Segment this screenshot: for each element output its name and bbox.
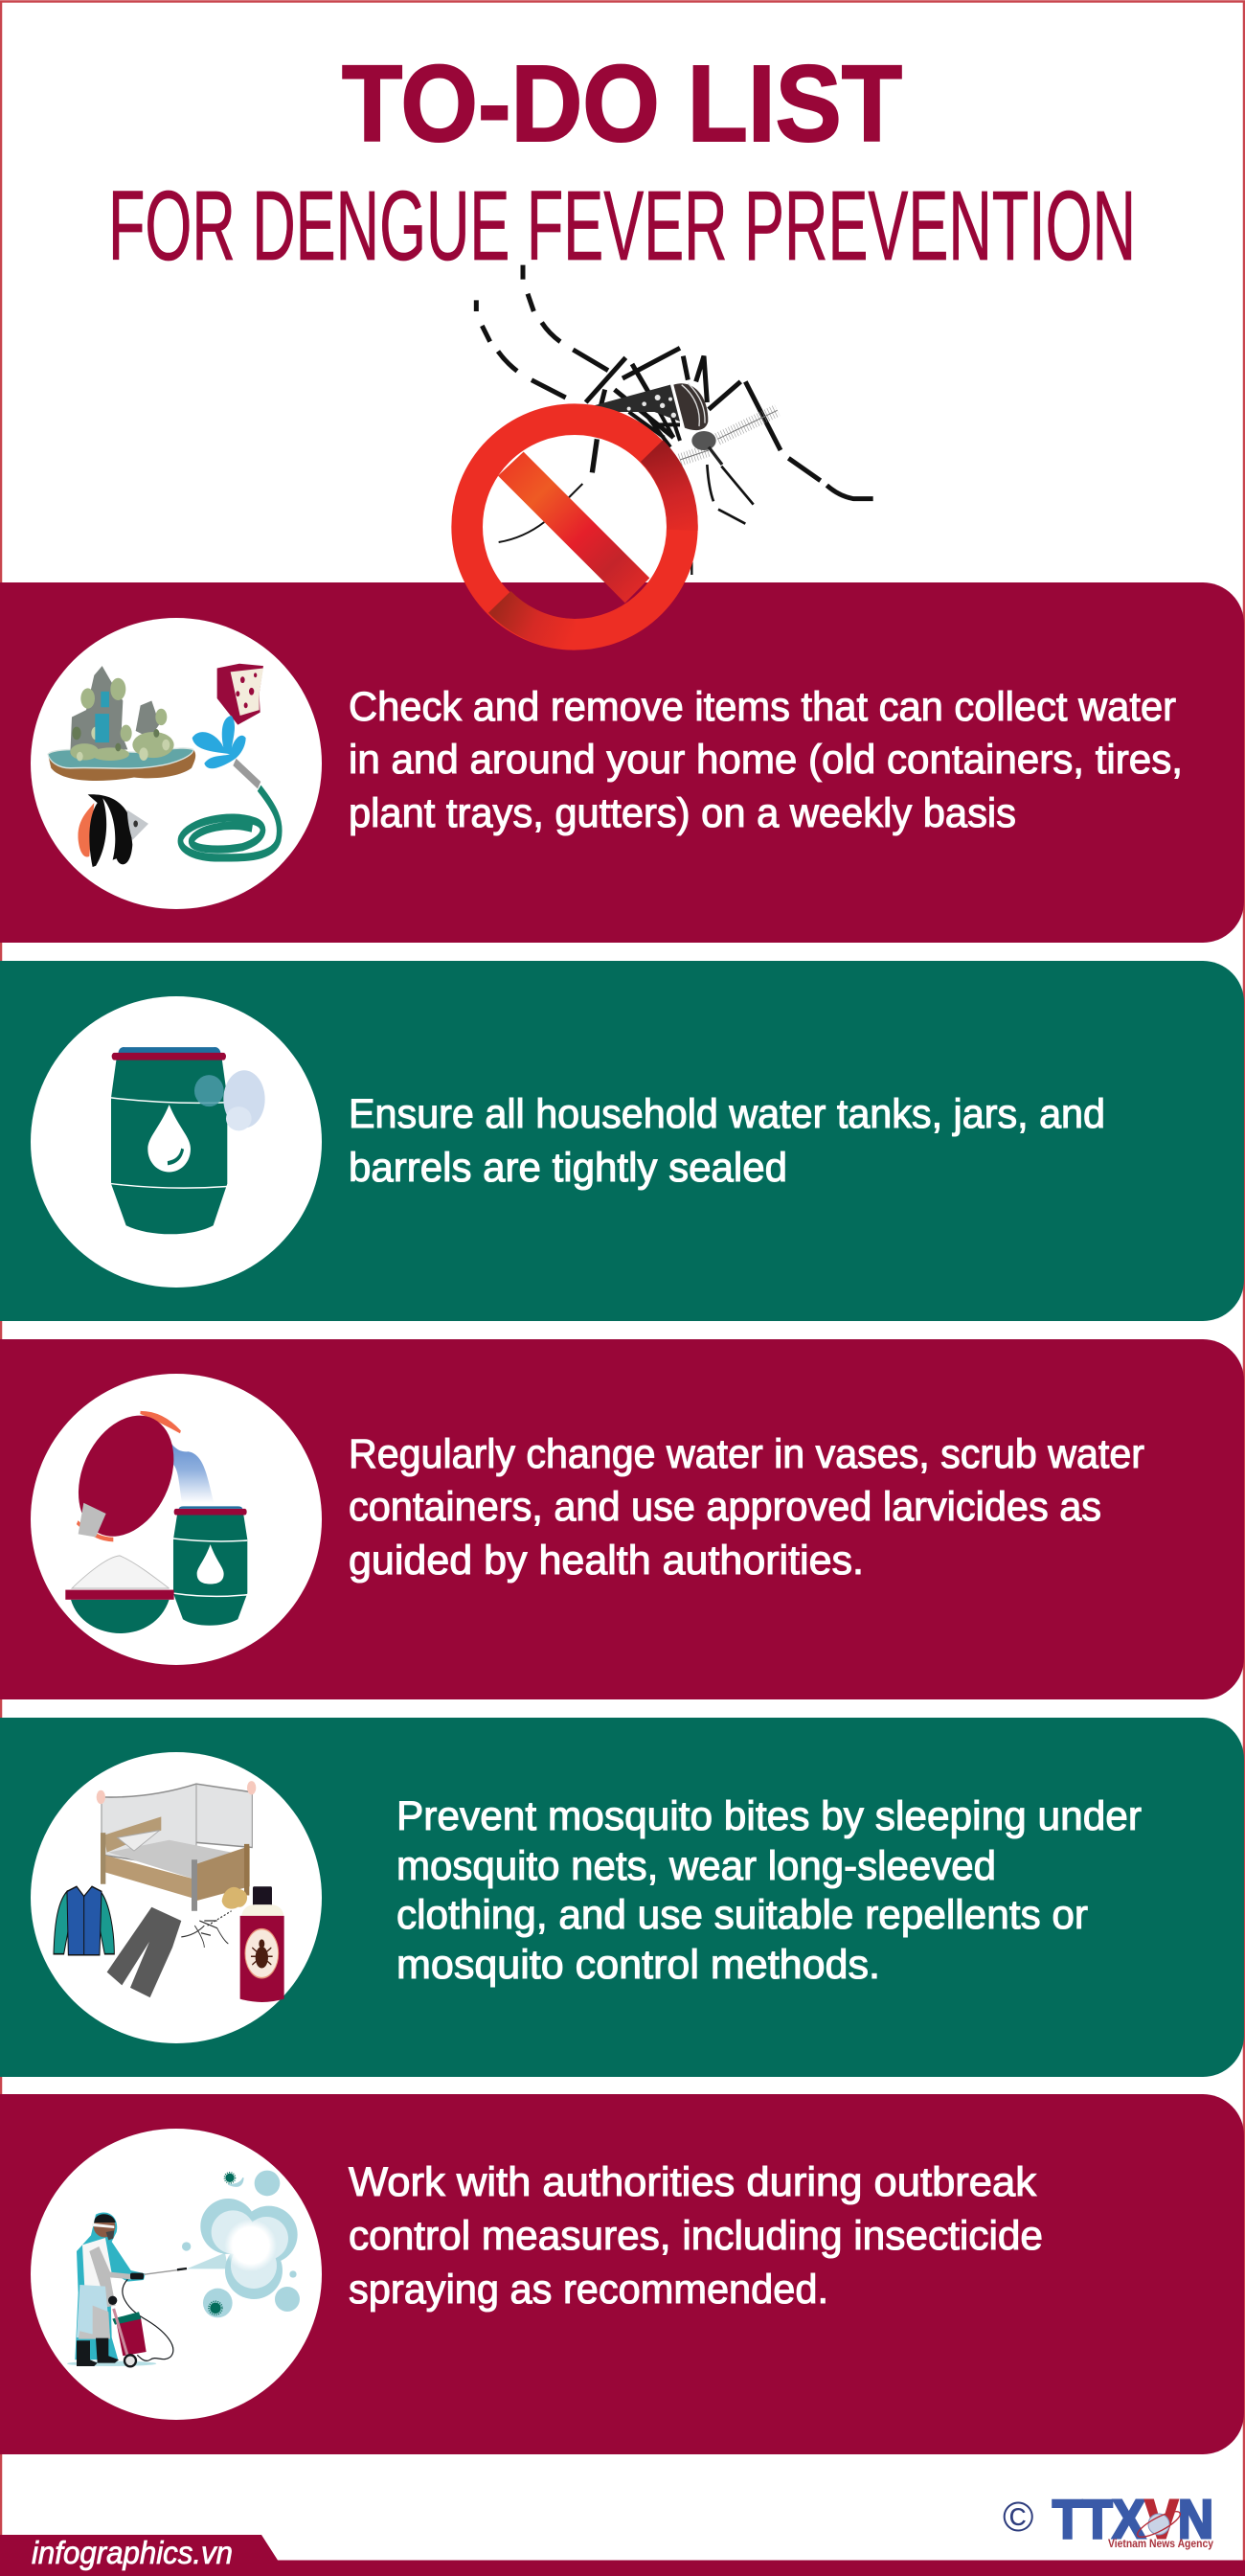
text block: in and around your home (old containers, tires,	[349, 737, 1183, 783]
website label: infographics.vn	[32, 2535, 233, 2570]
icon: water splash	[192, 716, 246, 768]
text block: mosquito control methods.	[396, 1942, 880, 1988]
icon: bowl of powder	[65, 1556, 174, 1633]
icon: tipped container	[65, 1391, 188, 1561]
panel: change water	[0, 1339, 1244, 1699]
icon: trousers	[107, 1907, 181, 1997]
text block	[396, 1793, 1142, 1988]
text block: containers, and use approved larvicides as	[349, 1484, 1101, 1530]
text block: clothing, and use suitable repellents or	[396, 1892, 1088, 1938]
text block: control measures, including insecticide	[349, 2213, 1043, 2259]
icon: jacket	[54, 1886, 114, 1955]
panel: check and remove items	[0, 582, 1244, 943]
icon: barrel	[173, 1506, 247, 1626]
globe emblem	[1135, 2507, 1183, 2542]
text block: Work with authorities during outbreak	[349, 2159, 1037, 2205]
text block	[349, 2159, 1043, 2313]
panel: prevent bites	[0, 1718, 1244, 2077]
agency name: Vietnam News Agency	[1108, 2539, 1214, 2550]
text block	[349, 1431, 1144, 1584]
icon: spray cloud and viruses	[182, 2171, 300, 2317]
prohibition sign	[467, 420, 682, 634]
text block	[349, 1091, 1105, 1191]
text block: barrels are tightly sealed	[349, 1145, 787, 1191]
icon circle: items that collect water	[31, 618, 322, 909]
mosquito	[476, 265, 873, 575]
icon: worker with sprayer	[67, 2213, 187, 2366]
footer bar	[0, 2535, 1245, 2576]
icon: repellent spray	[222, 1886, 284, 2002]
text block: guided by health authorities.	[349, 1538, 864, 1584]
text block: plant trays, gutters) on a weekly basis	[349, 790, 1016, 836]
icon circle: insecticide spraying	[31, 2129, 322, 2420]
text block: Check and remove items that can collect water	[349, 684, 1176, 730]
text block: Ensure all household water tanks, jars, and	[349, 1091, 1105, 1137]
copyright mark: ©	[1003, 2494, 1033, 2541]
panel: work with authorities	[0, 2094, 1244, 2454]
text block: mosquito nets, wear long-sleeved	[396, 1843, 996, 1889]
icon: rock garden	[48, 666, 195, 781]
icon: bed with mosquito net	[97, 1781, 256, 1911]
icon: small mosquito	[181, 1911, 232, 1948]
TTXVN wordmark: TTXVN	[1053, 2489, 1213, 2550]
icon: hose	[180, 762, 280, 857]
text block: Prevent mosquito bites by sleeping under	[396, 1793, 1142, 1839]
icon circle: water barrel	[31, 996, 322, 1288]
icon: sponge	[217, 664, 263, 725]
icon circle: pouring water and larvicide	[31, 1374, 322, 1665]
icon circle: net, clothing, repellent	[31, 1752, 322, 2043]
text block: Regularly change water in vases, scrub water	[349, 1431, 1144, 1477]
panel: sealed water tanks	[0, 961, 1244, 1321]
icon: water stream	[153, 1420, 214, 1503]
logo: copyright and TTXVN	[1003, 2489, 1214, 2550]
icon: mosquito with prohibition sign	[467, 265, 873, 634]
text block	[349, 684, 1183, 836]
title: TO-DO LIST	[342, 43, 902, 164]
text block: spraying as recommended.	[349, 2267, 828, 2313]
icon: fish	[78, 794, 148, 867]
